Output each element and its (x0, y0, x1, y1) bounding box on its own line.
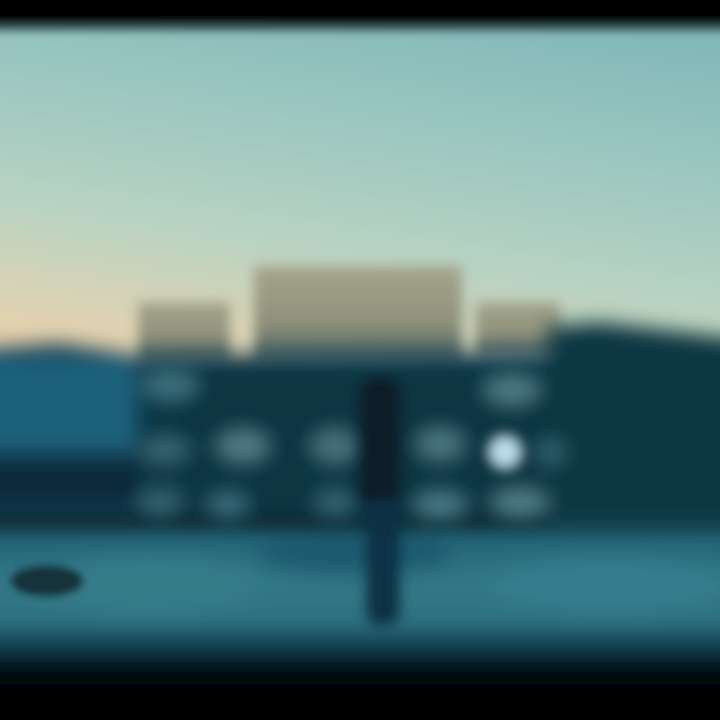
water and far shore (0, 322, 720, 530)
top black bar (0, 0, 720, 32)
lit windows (136, 368, 566, 520)
dark bottom edge (0, 628, 720, 720)
distant buildings (138, 266, 560, 360)
sky (0, 0, 720, 370)
dark foreground object (10, 565, 84, 597)
standing figure (360, 378, 400, 625)
foreground ice (0, 526, 720, 666)
bright highlight (488, 435, 522, 469)
